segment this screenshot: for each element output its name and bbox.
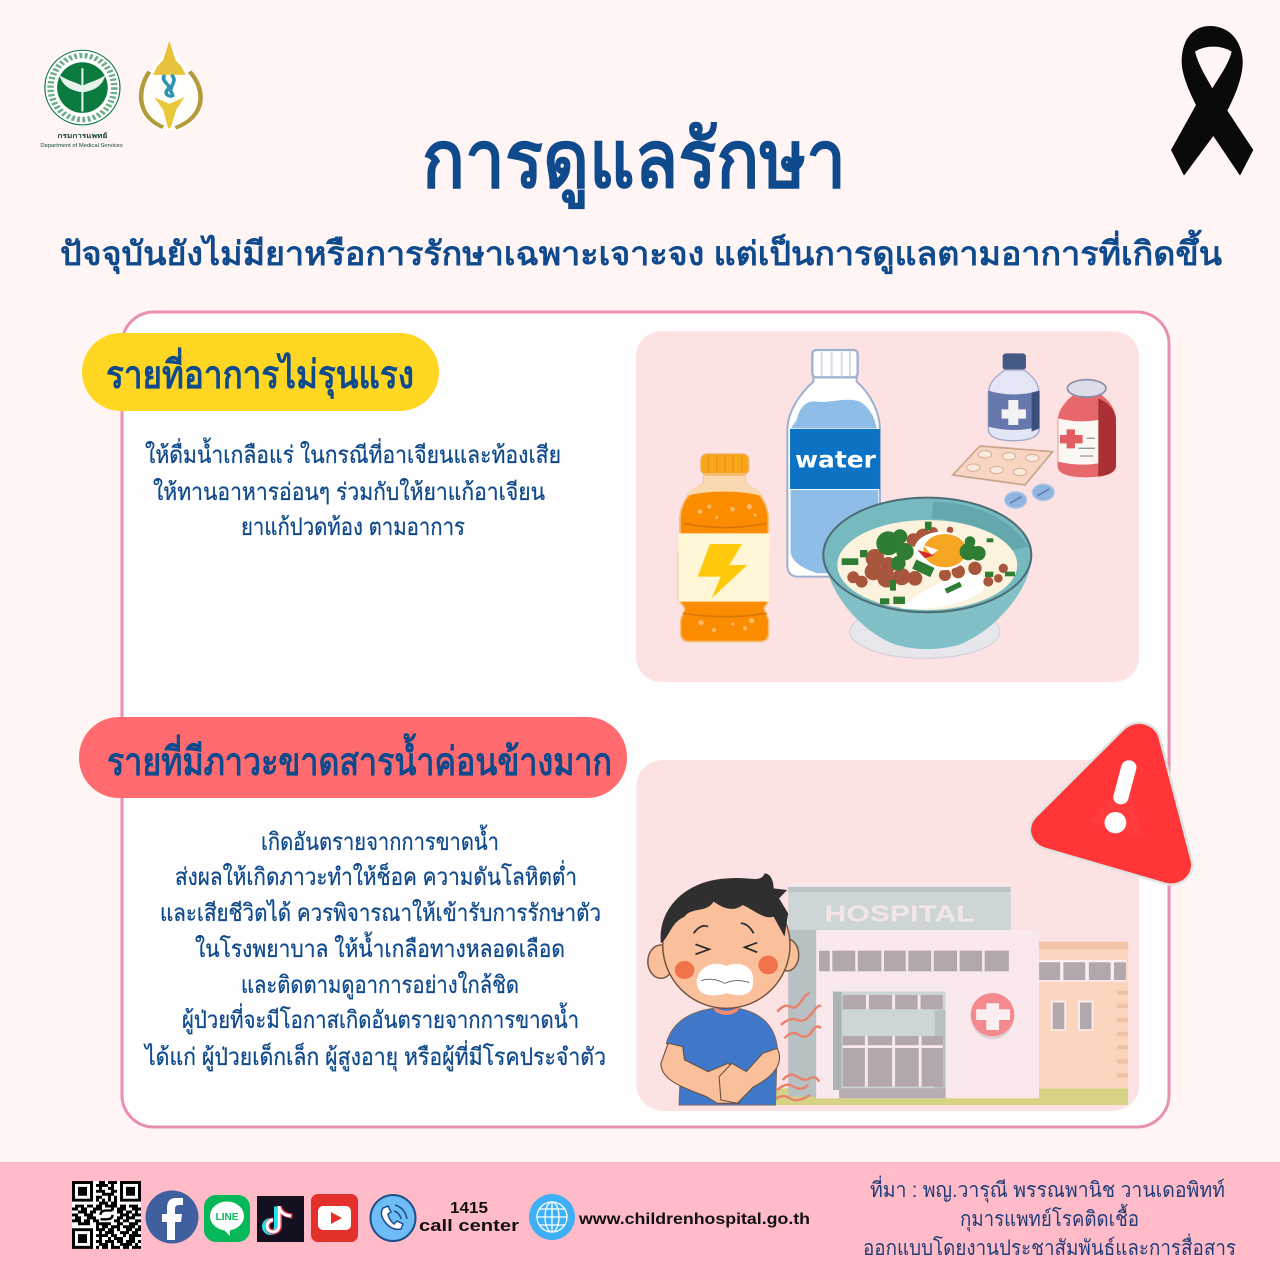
logo: Ministry of Public Health: Department of Medical Services <box>40 143 123 149</box>
text block: mild case advice: ให้ทานอาหารอ่อนๆ ร่วมกับให้ยาแก้อาเจียน <box>153 478 545 506</box>
badge: severe dehydration heading: รายที่มีภาวะขาดสารน้ำค่อนข้างมาก <box>107 733 612 784</box>
panel: main card <box>122 312 1169 1127</box>
text block: severe case advice <box>143 824 606 1072</box>
icon: sick boy holding stomach <box>648 873 799 1105</box>
badge: severe dehydration heading <box>79 717 627 798</box>
text block: severe case advice: ส่งผลให้เกิดภาวะทำให้ช็อค ความดันโลหิตต่ำ <box>175 860 577 891</box>
text block: mild case advice: ยาแก้ปวดท้อง ตามอาการ <box>241 514 465 541</box>
footer band <box>0 1162 1280 1280</box>
icon: TikTok <box>257 1196 304 1242</box>
icon: warning triangle <box>1051 742 1171 865</box>
logo: Ministry of Public Health: กรมการแพทย์ <box>58 132 107 140</box>
badge: mild cases heading <box>82 333 439 411</box>
source credits <box>863 1175 1236 1260</box>
call center text: 1415 <box>450 1200 488 1217</box>
icon: black mourning ribbon <box>1171 26 1253 176</box>
icon: pill blister pack and tablets <box>953 446 1054 508</box>
icon: YouTube <box>311 1194 358 1242</box>
icon: globe <box>529 1194 575 1240</box>
logo: Queen Sirikit institute emblem <box>139 40 203 131</box>
icon: water bottle <box>787 350 880 577</box>
icon: hospital building: HOSPITAL <box>825 902 975 927</box>
source credits: กุมารแพทย์โรคติดเชื้อ <box>960 1204 1139 1232</box>
panel: food and medicine illustration <box>636 331 1139 682</box>
badge: mild cases heading: รายที่อาการไม่รุนแรง <box>106 347 414 399</box>
text block: severe case advice: และติดตามดูอาการอย่างใกล้ชิด <box>241 971 519 1000</box>
icon: orange electrolyte bottle <box>678 454 770 642</box>
text block: mild case advice <box>145 437 561 541</box>
text block: severe case advice: และเสียชีวิตได้ ควรพิจารณาให้เข้ารับการรักษาตัว <box>160 899 601 927</box>
text block: severe case advice: เกิดอันตรายจากการขาดน้ำ <box>261 824 499 856</box>
subtitle: ปัจจุบันยังไม่มียาหรือการรักษาเฉพาะเจาะจง แต่เป็นการดูแลตามอาการที่เกิดขึ้น <box>60 229 1222 275</box>
icon: QR code <box>72 1181 141 1249</box>
icon: water bottle: water <box>795 446 876 474</box>
text block: mild case advice: ให้ดื่มน้ำเกลือแร่ ในกรณีที่อาเจียนและท้องเสีย <box>145 437 561 469</box>
icon: stink lines <box>774 993 821 1100</box>
icon: medicine bottle red <box>1058 380 1116 477</box>
icon: Facebook <box>146 1190 198 1244</box>
icon: medicine bottle blue <box>988 353 1039 441</box>
text block: severe case advice: ในโรงพยาบาล ให้น้ำเกลือทางหลอดเลือด <box>195 931 565 963</box>
panel: hospital illustration <box>637 760 1139 1111</box>
text block: severe case advice: ผู้ป่วยที่จะมีโอกาสเกิดอันตรายจากการขาดน้ำ <box>182 1002 579 1035</box>
icon: rice porridge bowl <box>823 498 1032 658</box>
icon: phone <box>370 1195 416 1241</box>
icon: hospital building <box>768 883 1128 1105</box>
icon: LINE: LINE <box>216 1212 239 1223</box>
call center text: call center <box>419 1216 519 1235</box>
call center text <box>419 1200 519 1235</box>
source credits: ออกแบบโดยงานประชาสัมพันธ์และการสื่อสาร <box>863 1233 1236 1260</box>
website address: www.childrenhospital.go.th <box>578 1211 810 1228</box>
icon: LINE <box>204 1195 250 1242</box>
source credits: ที่มา : พญ.วารุณี พรรณพานิช วานเดอพิทท์ <box>870 1175 1225 1203</box>
title: การดูแลรักษา <box>422 115 846 210</box>
logo: Ministry of Public Health <box>40 50 123 149</box>
text block: severe case advice: ได้แก่ ผู้ป่วยเด็กเล็ก ผู้สูงอายุ หรือผู้ที่มีโรคประจำตัว <box>143 1040 606 1072</box>
